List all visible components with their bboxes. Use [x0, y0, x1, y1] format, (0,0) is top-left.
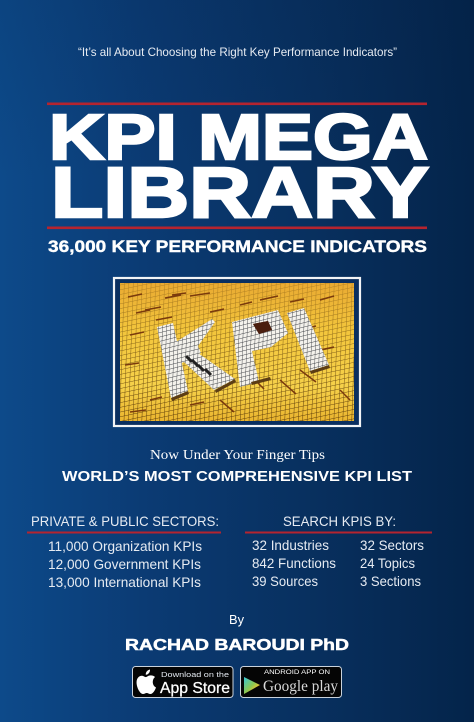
panel: search KPIs by: SEARCH KPIS BY: [283, 513, 396, 529]
badge: Google Play: Google play [263, 678, 338, 695]
title block: KPI MEGA [49, 101, 428, 173]
panel: search KPIs by: 39 Sources [252, 573, 318, 589]
panel: search KPIs by: 32 Sectors [360, 537, 424, 553]
KPI photo panel [114, 278, 360, 426]
subtitle: 36,000 KEY PERFORMANCE INDICATORS [48, 237, 427, 256]
comprehensive list heading: WORLD’S MOST COMPREHENSIVE KPI LIST [62, 469, 412, 485]
badge: App Store: App Store [160, 680, 230, 697]
panel: search KPIs by: 842 Functions [252, 555, 336, 571]
mosaic letters KPI [157, 308, 330, 401]
badge: App Store [132, 666, 233, 698]
title block [47, 101, 429, 233]
panel: search KPIs by: 24 Topics [360, 555, 415, 571]
title block: LIBRARY [51, 154, 429, 233]
author name: RACHAD BAROUDI PhD [125, 637, 349, 654]
finger tips line: Now Under Your Finger Tips [150, 447, 325, 462]
panel: private and public sectors: 13,000 International KPIs [48, 574, 201, 590]
panel: private and public sectors [27, 513, 221, 590]
panel: private and public sectors: PRIVATE & PUBLIC SECTORS: [31, 513, 219, 529]
author by: By [229, 612, 244, 627]
badge: App Store: Download on the [161, 670, 229, 679]
tagline quote: “It’s all About Choosing the Right Key Performance Indicators” [78, 45, 397, 59]
panel: private and public sectors: 12,000 Government KPIs [48, 556, 201, 572]
panel: search KPIs by [245, 513, 432, 589]
badge: Google Play [240, 666, 342, 698]
panel: search KPIs by: 32 Industries [252, 537, 329, 553]
badge: Google Play: ANDROID APP ON [264, 669, 330, 676]
icon: play triangle [244, 677, 260, 694]
panel: private and public sectors: 11,000 Organization KPIs [48, 538, 202, 554]
icon: apple logo [137, 670, 156, 694]
panel: search KPIs by: 3 Sections [360, 573, 421, 589]
